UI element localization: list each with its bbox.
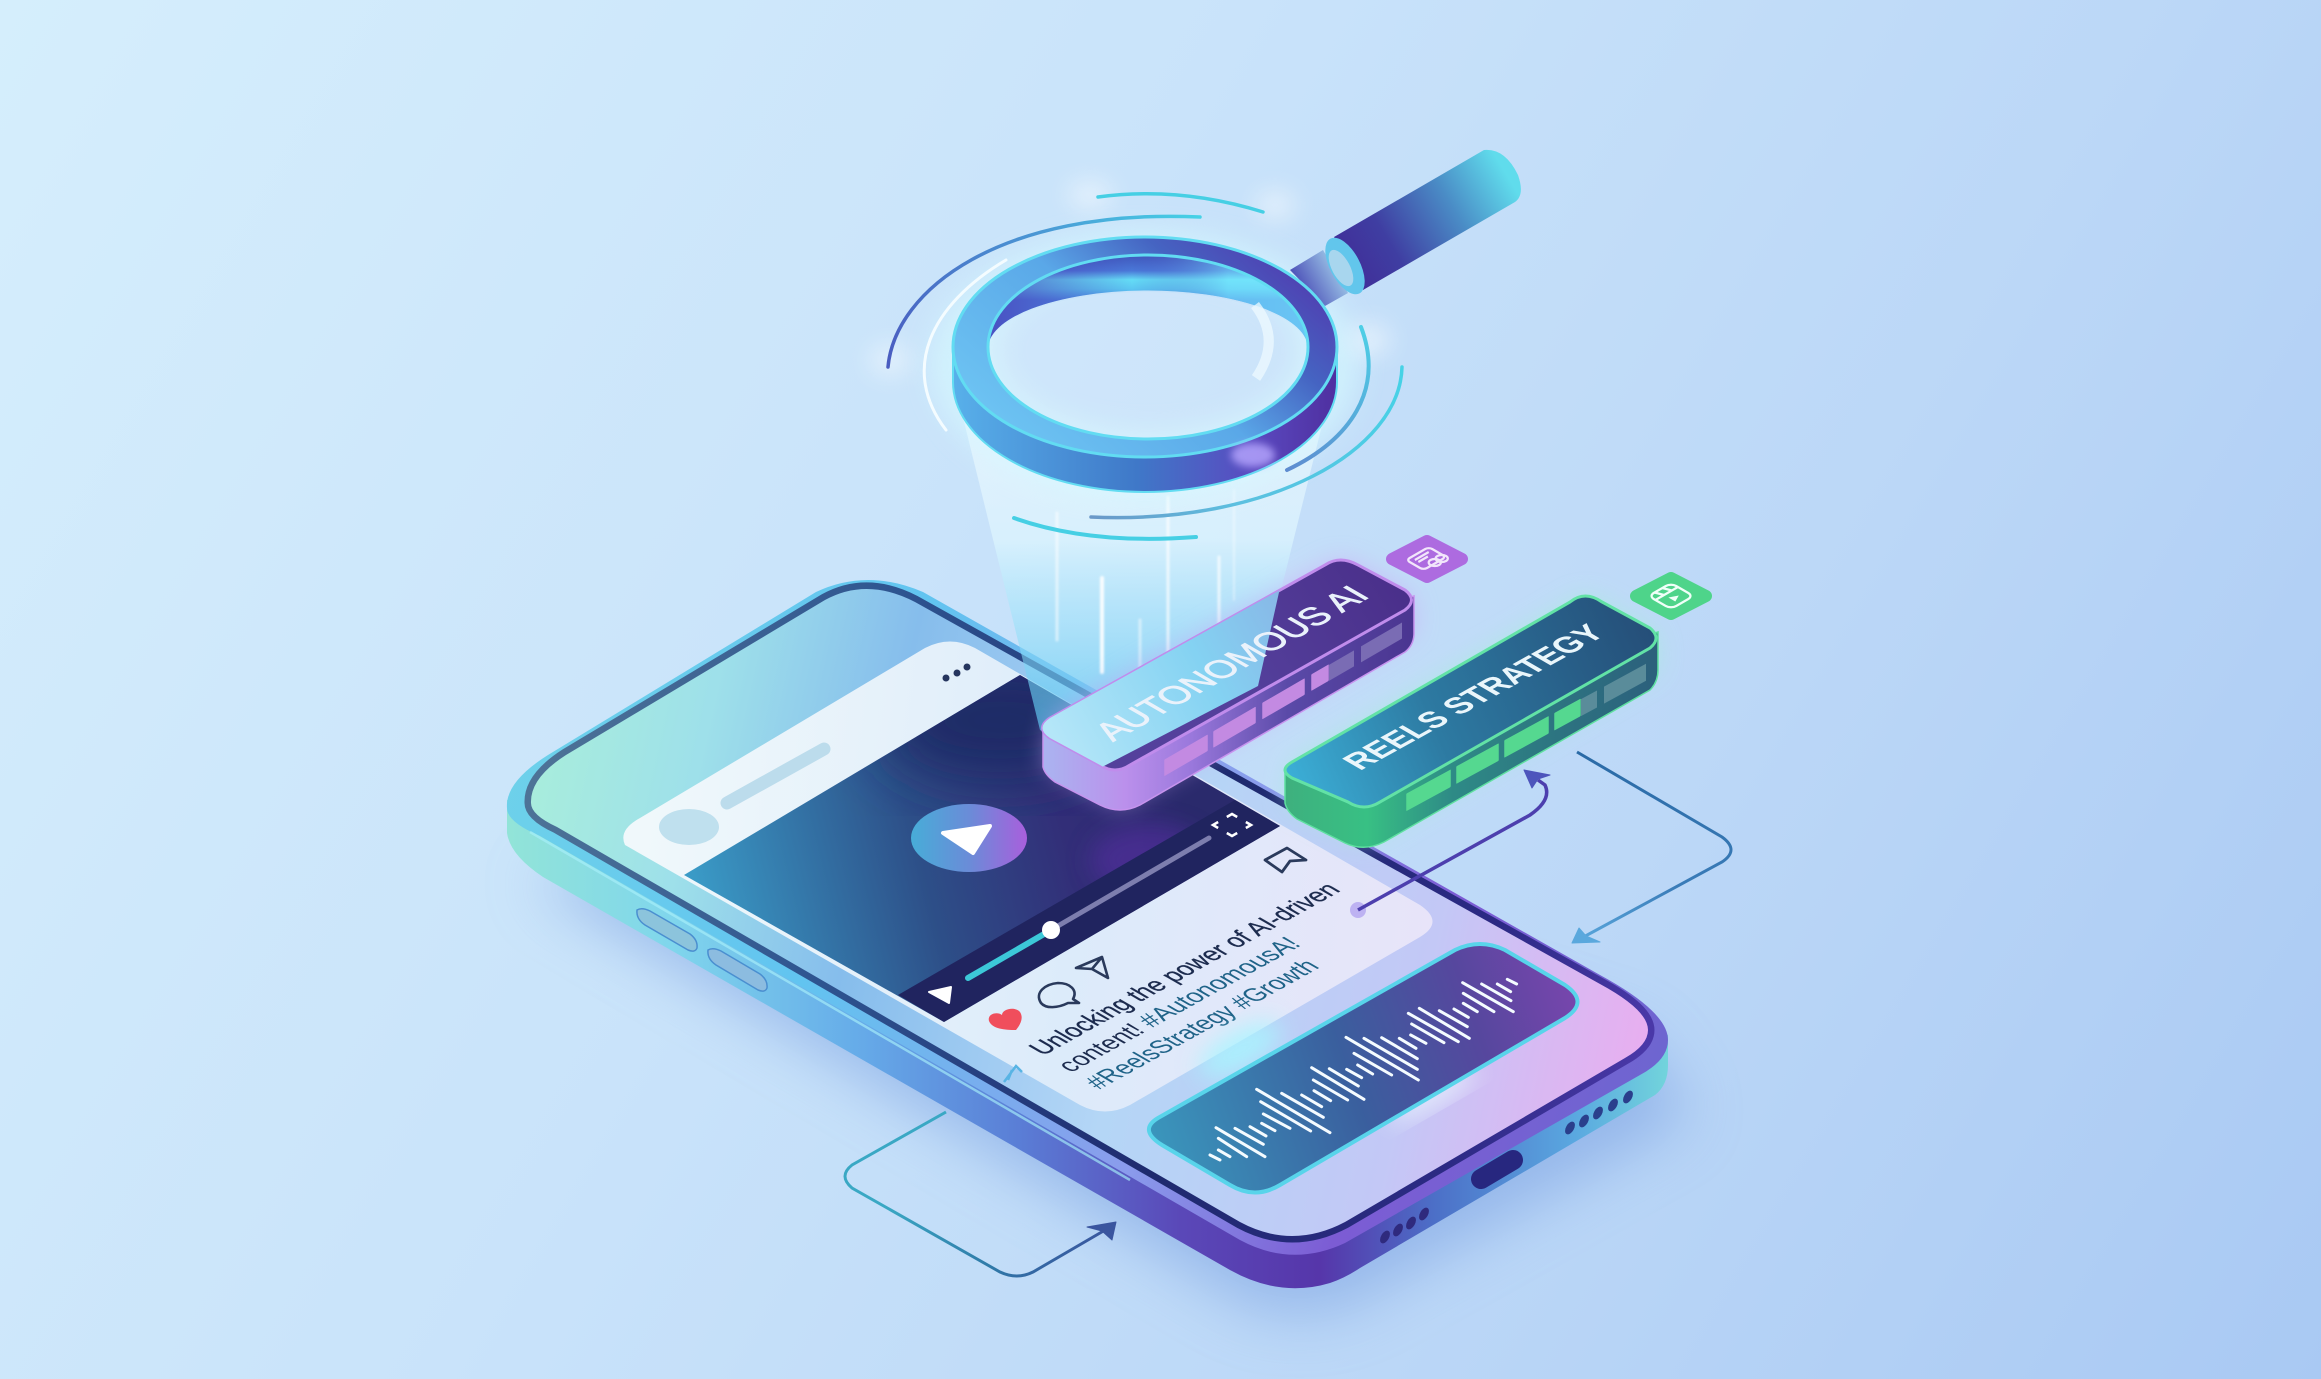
- tag inactive blocks: [1329, 623, 1402, 681]
- tag: Reels Strategy: [1285, 596, 1659, 847]
- username placeholder: [727, 749, 824, 803]
- phone: [507, 580, 1668, 1288]
- speaker holes right: [1563, 1089, 1635, 1136]
- waveform panel: [1149, 944, 1578, 1192]
- tag glass section: [1042, 590, 1280, 766]
- tag label: AUTONOMOUS AI: [1084, 580, 1378, 746]
- avatar: [659, 809, 719, 845]
- tag: Autonomous AI: [1031, 554, 1422, 818]
- lens glass: [988, 292, 1308, 442]
- caption text: Unlocking the power of AI-driven: [1022, 879, 1347, 1059]
- light beam: [955, 385, 1332, 775]
- heart icon: [989, 1009, 1022, 1030]
- arrow: caption to reels tag: [1350, 770, 1550, 918]
- tag inactive blocks: [1581, 664, 1646, 716]
- tag indicator blocks: [1407, 700, 1580, 810]
- speaker holes left: [1378, 1206, 1431, 1245]
- rim highlight: [530, 832, 1130, 1180]
- phone drop shadow: [530, 800, 1690, 1314]
- icon: purple tile: [1392, 541, 1462, 577]
- mini play icon: [929, 987, 951, 1003]
- arc glow spots: [870, 181, 1390, 374]
- progress bar: [968, 838, 1209, 978]
- caption text: #ReelsStrategy #Growth: [1078, 955, 1326, 1093]
- arrow: phone loop bottom left: [845, 1066, 1116, 1276]
- tag top face: [1042, 560, 1412, 770]
- card panel: [623, 642, 1432, 1112]
- lens ambient glow: [930, 230, 1360, 500]
- panel edge glow lower: [1384, 1061, 1480, 1129]
- handle grip: [1334, 150, 1521, 290]
- menu dots: [942, 664, 970, 682]
- caption text: [1022, 879, 1347, 1093]
- button: volume down: [708, 949, 767, 991]
- panel face: [1149, 944, 1578, 1192]
- phone body side: [507, 800, 1668, 1288]
- panel edge glow upper: [1191, 1011, 1289, 1089]
- comment icon: [1039, 983, 1079, 1007]
- lens inner wall: [988, 255, 1308, 350]
- arrow: reels tag to phone: [1572, 752, 1731, 943]
- tag indicator blocks: [1165, 665, 1328, 775]
- phone outer rim: [507, 580, 1668, 1255]
- tag side: [1285, 632, 1658, 847]
- lens rim top: [953, 237, 1337, 457]
- beam cone: [955, 385, 1332, 775]
- video area: [684, 660, 1280, 1022]
- lens inner wall tint: [988, 255, 1308, 350]
- fullscreen icon: [1213, 814, 1251, 836]
- phone screen: [531, 589, 1648, 1236]
- lens rim side: [953, 347, 1337, 492]
- charging port: [1481, 1160, 1513, 1179]
- tag top face: [1285, 596, 1656, 807]
- magnifying glass: [930, 150, 1521, 500]
- motion arcs: [870, 181, 1402, 539]
- tag glow: [1285, 596, 1659, 845]
- send icon: [1076, 957, 1108, 978]
- caption text: content! #AutonomousA!: [1050, 933, 1307, 1076]
- tag side: [1043, 596, 1414, 810]
- play button: [911, 804, 1027, 872]
- video control bar: [898, 800, 1280, 1022]
- post card: [623, 642, 1432, 1112]
- audio waveform: [1210, 979, 1517, 1160]
- handle neck: [1290, 250, 1348, 306]
- tag label: REELS STRATEGY: [1334, 619, 1613, 774]
- tag glow: [1043, 560, 1415, 808]
- lens highlight: [1255, 305, 1269, 378]
- button: volume up: [637, 909, 697, 951]
- rim glint: [1231, 443, 1275, 467]
- handle collar: [1317, 232, 1373, 300]
- icon: green tile: [1636, 578, 1706, 614]
- beam light streaks: [1057, 490, 1234, 722]
- bookmark icon: [1265, 848, 1306, 872]
